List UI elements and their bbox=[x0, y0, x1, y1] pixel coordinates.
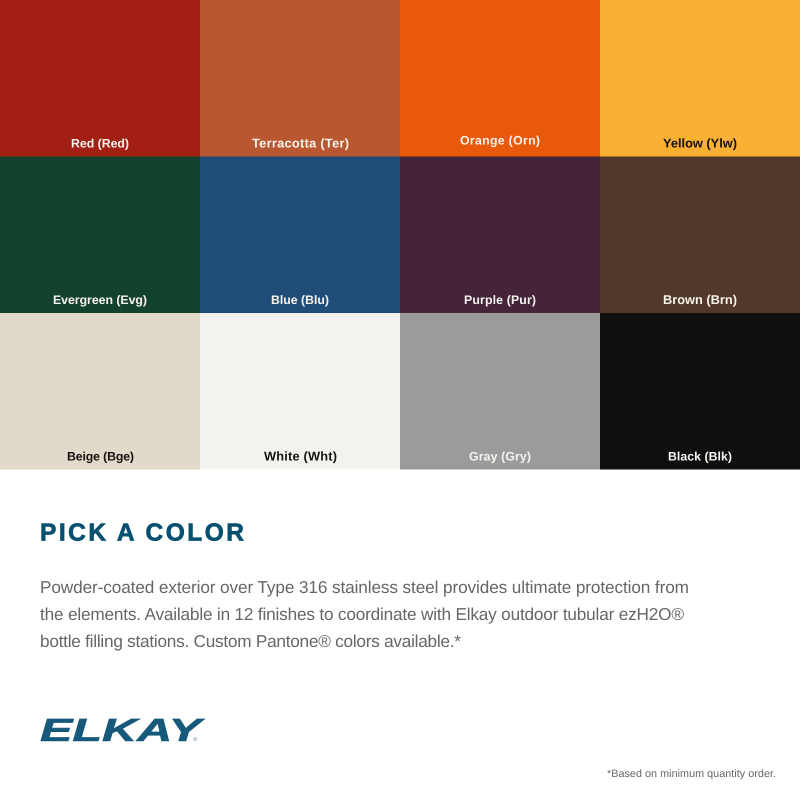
logo: Elkay: ® bbox=[193, 736, 198, 743]
swatch: Yellow: Yellow (Ylw) bbox=[663, 136, 737, 150]
swatch: Evergreen bbox=[0, 156, 200, 313]
body text: the elements. Available in 12 finishes to coordinate with Elkay outdoor tubular ezH2O® bbox=[40, 604, 684, 624]
heading: PICK A COLOR bbox=[40, 520, 244, 546]
swatch: Red bbox=[0, 0, 200, 156]
swatch: Terracotta: Terracotta (Ter) bbox=[252, 136, 349, 150]
swatch: Brown: Brown (Brn) bbox=[663, 292, 737, 307]
swatch: Orange bbox=[400, 0, 600, 156]
footnote: *Based on minimum quantity order. bbox=[607, 768, 776, 780]
body text: Powder-coated exterior over Type 316 stainless steel provides ultimate protection from bbox=[40, 577, 689, 597]
swatch: Red: Red (Red) bbox=[71, 136, 129, 150]
body text: bottle filling stations. Custom Pantone® colors available.* bbox=[40, 631, 461, 651]
swatch: White: White (Wht) bbox=[264, 448, 337, 464]
logo: Elkay: ELKAY bbox=[40, 712, 205, 748]
swatch: Beige: Beige (Bge) bbox=[67, 450, 134, 464]
swatch: Purple: Purple (Pur) bbox=[464, 293, 536, 307]
body text bbox=[40, 577, 689, 651]
swatch: Gray bbox=[400, 313, 600, 470]
swatch: Beige bbox=[0, 313, 200, 470]
swatch: Brown bbox=[600, 156, 800, 313]
swatch: Terracotta bbox=[200, 0, 400, 156]
swatch: Blue bbox=[200, 156, 400, 313]
swatch: White bbox=[200, 313, 400, 470]
swatch: Blue: Blue (Blu) bbox=[271, 293, 329, 307]
swatch: Gray: Gray (Gry) bbox=[469, 450, 531, 464]
swatch: Black bbox=[600, 313, 800, 470]
swatch: Yellow bbox=[600, 0, 800, 156]
swatch: Black: Black (Blk) bbox=[668, 450, 732, 464]
logo: Elkay bbox=[40, 712, 205, 748]
swatch: Purple bbox=[400, 156, 600, 313]
swatch: Evergreen: Evergreen (Evg) bbox=[53, 293, 147, 307]
swatch: Orange: Orange (Orn) bbox=[460, 134, 540, 148]
